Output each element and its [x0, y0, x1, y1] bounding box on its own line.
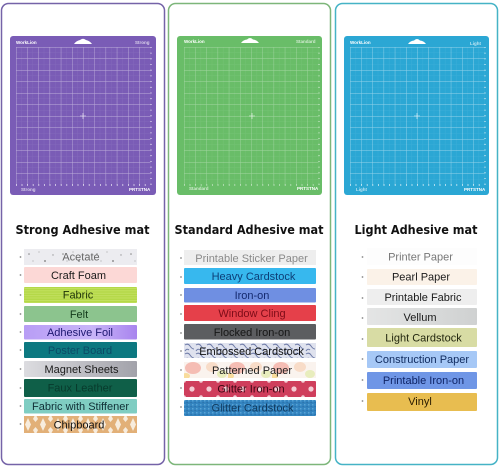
list: strong materials: Craft Foam — [51, 270, 106, 282]
list: light materials: Printable Iron-on — [383, 375, 464, 387]
blue cutting mat: Light — [470, 41, 481, 46]
list: standard materials: Window Cling — [218, 308, 286, 320]
list: strong materials — [20, 249, 137, 433]
list: light materials: Vinyl — [408, 396, 432, 408]
list: light materials: Printer Paper — [388, 252, 453, 264]
list: light materials: Printable Fabric — [384, 292, 462, 304]
green cutting mat: Standard — [296, 39, 316, 44]
heading: standard: Standard Adhesive mat — [174, 222, 324, 237]
panel: standard adhesive mat — [168, 4, 330, 464]
list: standard materials: Patterned Paper — [212, 365, 292, 377]
list: strong materials: Magnet Sheets — [44, 364, 119, 376]
panel: strong adhesive mat — [2, 4, 164, 464]
list: standard materials: Embossed Cardstock — [199, 346, 304, 358]
purple cutting mat: PRTSTNA — [129, 187, 151, 192]
list: strong materials: Fabric — [63, 290, 94, 302]
purple cutting mat — [10, 36, 156, 195]
list: strong materials: Faux Leather — [48, 382, 113, 394]
purple cutting mat: WorkLion — [16, 40, 37, 45]
purple cutting mat: Strong — [135, 40, 150, 45]
heading: light: Light Adhesive mat — [354, 222, 478, 237]
list: light materials: Construction Paper — [375, 354, 469, 366]
list: standard materials: Heavy Cardstock — [212, 271, 296, 283]
list: light materials: Pearl Paper — [392, 272, 450, 284]
list: standard materials: Glitter Iron-on — [217, 384, 285, 396]
list: standard materials: Iron-on — [235, 290, 269, 302]
green cutting mat: WorkLion — [184, 39, 205, 44]
heading: strong: Strong Adhesive mat — [16, 222, 150, 237]
blue cutting mat: Light — [356, 187, 367, 192]
list: strong materials: Acetate — [62, 252, 100, 264]
list: strong materials: Felt — [70, 309, 88, 321]
list: light materials: Vellum — [403, 312, 437, 324]
list: strong materials: Adhesive Foil — [47, 327, 113, 339]
list: light materials: Light Cardstock — [385, 332, 462, 344]
list: strong materials: Chipboard — [54, 420, 104, 432]
list: standard materials — [180, 250, 316, 416]
list: light materials — [362, 248, 477, 411]
green cutting mat — [177, 36, 322, 195]
list: standard materials: Flocked Iron-on — [214, 327, 290, 339]
list: strong materials: Fabric with Stiffener — [32, 401, 129, 413]
green cutting mat: PRTSTNA — [297, 186, 319, 191]
blue cutting mat: PRTSTNA — [464, 187, 486, 192]
purple cutting mat: Strong — [21, 187, 36, 192]
green cutting mat: Standard — [189, 186, 209, 191]
blue cutting mat — [344, 36, 489, 195]
blue cutting mat: WorkLion — [350, 40, 371, 45]
list: standard materials: Printable Sticker Paper — [195, 253, 308, 265]
panel: light adhesive mat — [336, 4, 498, 464]
list: standard materials: Glitter Cardstock — [212, 402, 294, 414]
list: strong materials: Poster Board — [48, 345, 112, 357]
